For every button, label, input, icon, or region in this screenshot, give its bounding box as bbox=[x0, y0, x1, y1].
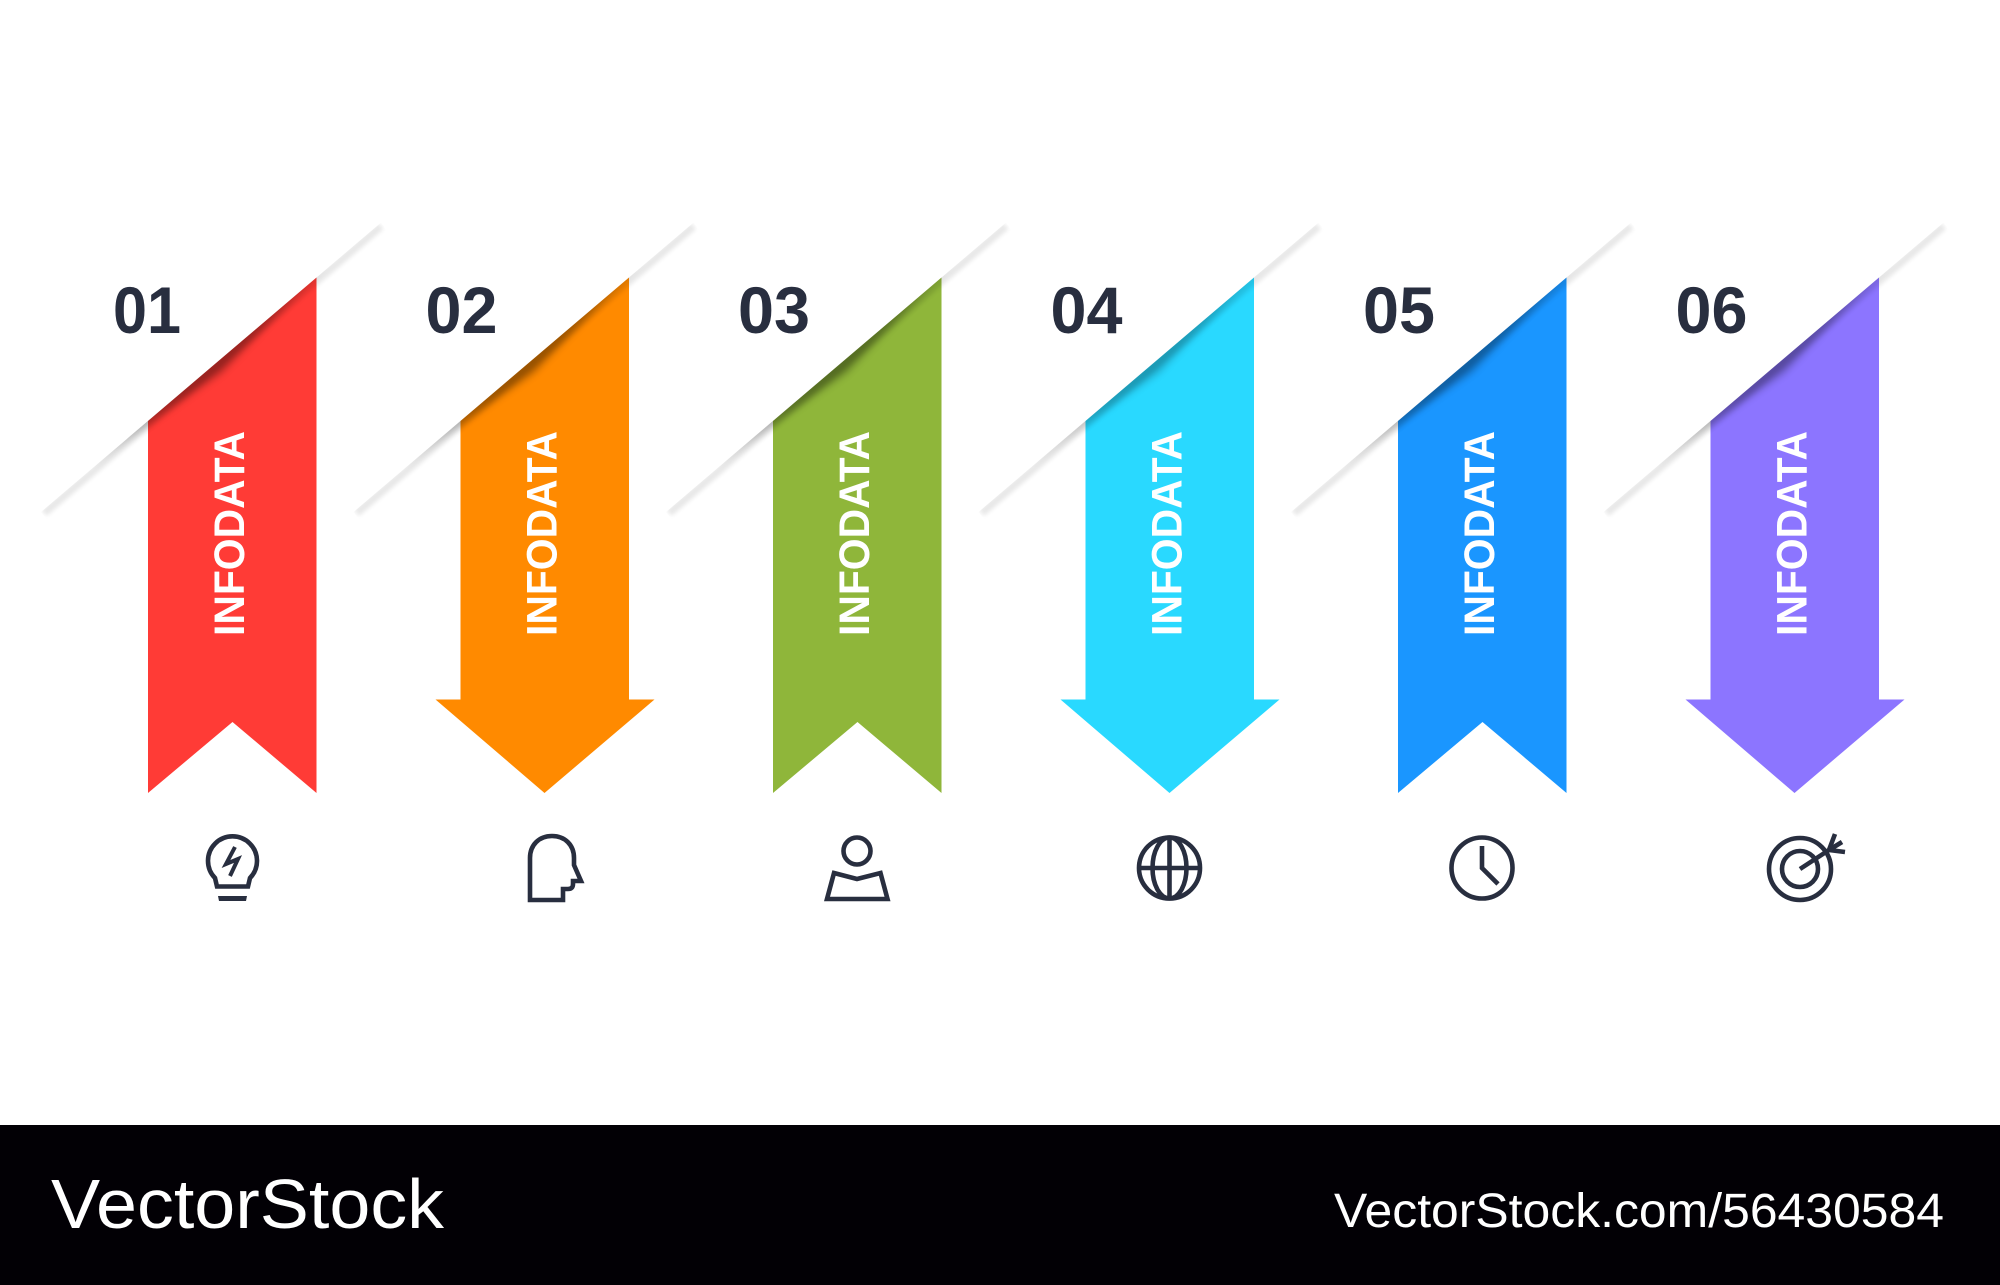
arrow 02 bbox=[436, 278, 654, 793]
label 05: INFODATA bbox=[1456, 431, 1504, 636]
step 05 bbox=[1294, 226, 1631, 793]
ribbon 05 bbox=[1398, 278, 1566, 793]
label 03: INFODATA bbox=[831, 431, 879, 636]
step 06 bbox=[1606, 226, 1944, 793]
fold shadow 03 bbox=[669, 226, 1006, 513]
ribbon 03 bbox=[773, 278, 942, 793]
number 04: 04 bbox=[1050, 273, 1123, 347]
icon: person with map bbox=[827, 838, 888, 899]
icon: clock bbox=[1452, 838, 1512, 898]
label 01: INFODATA bbox=[206, 431, 254, 636]
icon: target with arrow bbox=[1769, 834, 1845, 900]
icon: globe bbox=[1139, 837, 1200, 899]
fold shadow 05 bbox=[1294, 226, 1631, 513]
step 01 bbox=[44, 226, 381, 901]
fold shadow 01 bbox=[44, 226, 381, 513]
fold shadow 06 bbox=[1606, 226, 1944, 513]
ribbon 01 bbox=[148, 278, 316, 793]
icon: head profile bbox=[530, 836, 581, 900]
label 06: INFODATA bbox=[1768, 431, 1816, 636]
number 02: 02 bbox=[426, 273, 498, 347]
label 02: INFODATA bbox=[518, 431, 566, 636]
number 05: 05 bbox=[1363, 273, 1435, 347]
number 03: 03 bbox=[738, 273, 810, 347]
step 02 bbox=[356, 226, 694, 793]
step 03 bbox=[669, 226, 1006, 793]
arrow 04 bbox=[1060, 278, 1280, 793]
fold shadow 04 bbox=[982, 226, 1318, 513]
number 01: 01 bbox=[113, 273, 181, 347]
footer url: VectorStock.com/56430584 bbox=[1334, 1185, 1944, 1238]
icon: light bulb bbox=[208, 836, 257, 901]
footer brand: VectorStock bbox=[51, 1165, 445, 1243]
footer bar bbox=[0, 1125, 2000, 1285]
number 06: 06 bbox=[1676, 273, 1748, 347]
arrow 06 bbox=[1686, 278, 1904, 793]
step 04 bbox=[982, 226, 1318, 793]
fold shadow 02 bbox=[356, 226, 694, 513]
label 04: INFODATA bbox=[1144, 431, 1192, 636]
